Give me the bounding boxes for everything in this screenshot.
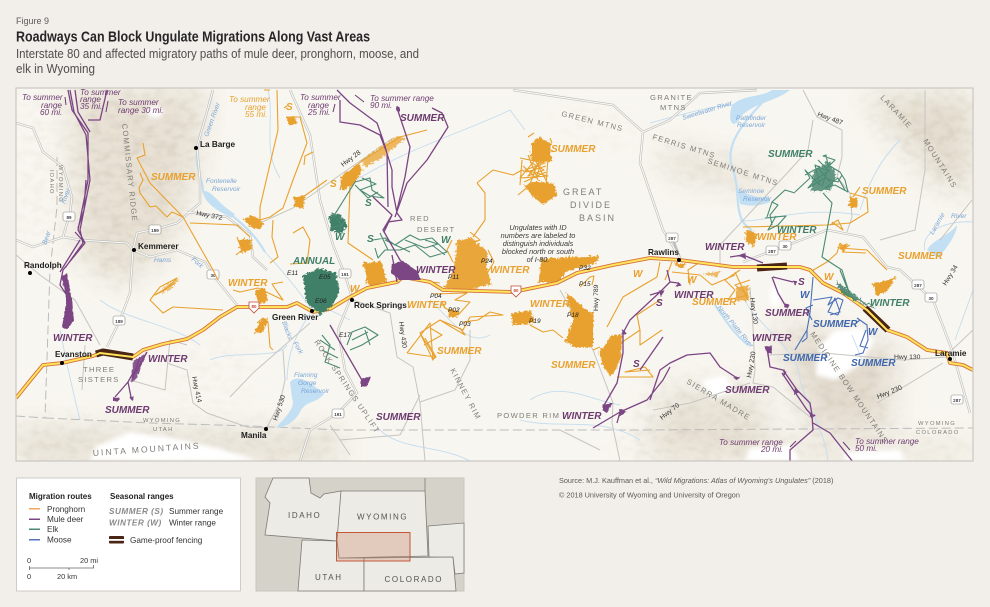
mountain and basin labels: WYOMING [918, 421, 956, 427]
figure number: Figure 9 [16, 16, 49, 27]
highway labels: Hwy 487 [816, 111, 844, 127]
range labels: mule deer: SUMMER [725, 385, 770, 396]
legend: scale bar: 0 [27, 572, 31, 581]
highway labels: Hwy 430 [397, 321, 408, 349]
panel: legend [16, 478, 240, 591]
water labels: River [951, 213, 967, 220]
water labels: Fork [291, 340, 304, 356]
panel: legend: Migration routes [29, 492, 92, 501]
range labels: elk: SUMMER [768, 149, 813, 160]
town labels and dots: Green River [272, 313, 319, 322]
range labels: pronghorn: WINTER [228, 278, 268, 289]
individual ID labels: P04 [430, 293, 442, 300]
title: Roadways Can Block Ungulate Migrations Along Vast Areas [16, 28, 370, 46]
water labels: Reservoir [212, 186, 241, 193]
water labels: Laramie [929, 212, 947, 236]
legend: scale bar: 0 [27, 556, 31, 565]
legend: scale bar [27, 556, 98, 581]
water labels: North Platte River [715, 305, 755, 350]
summer range distance notes [22, 88, 919, 454]
legend: route swatches: Elk [47, 525, 59, 534]
highway labels: Hwy 530 [272, 394, 287, 422]
legend: route swatches: Pronghorn [47, 505, 86, 514]
mountain and basin labels: IDAHO [48, 170, 54, 195]
range labels: elk: W [441, 235, 452, 246]
range labels: pronghorn: W [687, 275, 698, 286]
highway shields: 191 [341, 272, 349, 277]
individual ID labels: P03 [459, 321, 471, 328]
panel: locator inset map: UTAH [315, 573, 343, 582]
highway labels: Hwy 372 [196, 210, 223, 222]
panel: locator inset map: COLORADO [384, 575, 443, 584]
legend: seasonal ranges: SUMMER (S) [109, 507, 164, 516]
range labels: mule deer: WINTER [562, 411, 602, 422]
range labels: moose: SUMMER [813, 319, 858, 330]
state borders [16, 157, 973, 430]
legend: seasonal ranges: WINTER (W) [109, 518, 162, 528]
rivers and reservoirs [60, 90, 973, 461]
legend: route swatches: Moose [47, 536, 72, 544]
summer range distance notes: 60 mi. [40, 108, 62, 117]
highway labels: Hwy 70 [659, 402, 681, 422]
mountain and basin labels: GREEN MTNS [561, 109, 624, 133]
town labels and dots: Evanston [55, 350, 92, 359]
mountain and basin labels: MEDICINE BOW MOUNTAINS [808, 330, 890, 445]
callout: ID numbers note: distinguish individuals [503, 239, 574, 248]
mountain and basin labels: POWDER RIM [497, 411, 560, 420]
routes: pronghorn [137, 90, 895, 377]
legend: route swatches [29, 505, 86, 544]
range labels: pronghorn: S [286, 102, 293, 113]
mountain and basin labels: WYOMING [143, 418, 181, 424]
water labels: Seminoe [738, 188, 764, 195]
interstate shields [249, 286, 521, 313]
source note [559, 476, 833, 500]
individual ID labels [287, 258, 591, 339]
legend: game-proof fencing: Game-proof fencing [130, 536, 203, 545]
mountain and basin labels: UINTA MOUNTAINS [92, 440, 201, 458]
range labels: mule deer: WINTER [148, 354, 188, 365]
summer range distance notes: range [80, 95, 101, 104]
range labels: mule deer: SUMMER [376, 412, 421, 423]
range labels: mule deer: WINTER [752, 333, 792, 344]
subtitle: elk in Wyoming [16, 62, 95, 76]
highway shields: 30 [210, 273, 216, 278]
mountain and basin labels: KINNEY RIM [448, 367, 483, 421]
highway shields: 287 [768, 249, 776, 254]
highway shields: 30 [928, 296, 934, 301]
water labels: Fork [190, 256, 205, 270]
range labels: pronghorn: W [350, 284, 361, 295]
water labels: Flaming [294, 372, 318, 379]
mountain and basin labels: MOUNTAINS [921, 137, 959, 190]
range labels: mule deer [53, 113, 810, 423]
mountain and basin labels: COMMISSARY RIDGE [120, 123, 139, 222]
mountain and basin labels: SIERRA MADRE [685, 377, 752, 422]
mountain and basin labels: BASIN [579, 213, 616, 223]
highway labels: Hwy 230 [876, 384, 903, 401]
map frame [16, 88, 973, 461]
mountain and basin labels: UTAH [153, 427, 174, 433]
callout: ID numbers note [501, 223, 575, 264]
highway labels: Hwy 789 [593, 284, 600, 311]
individual ID labels: P02 [448, 307, 460, 314]
town labels and dots: La Barge [200, 140, 235, 149]
highway labels: Hwy 414 [190, 376, 202, 403]
individual ID labels: P18 [567, 312, 579, 319]
panel: legend: Seasonal ranges [110, 492, 174, 501]
range labels: pronghorn: SUMMER [692, 297, 737, 308]
range labels: mule deer: SUMMER [105, 405, 150, 416]
town labels and dots: Laramie [935, 349, 967, 358]
highway labels [190, 111, 960, 422]
legend: seasonal ranges: Winter range [169, 518, 216, 528]
individual ID labels: P24 [481, 258, 493, 265]
summer range distance notes: range [41, 101, 62, 110]
town labels and dots: Randolph [24, 261, 62, 270]
water labels [41, 100, 967, 395]
routes: moose [795, 277, 868, 355]
range labels: elk [292, 149, 910, 309]
summer range distance notes: To summer [80, 88, 121, 97]
panel: main map [16, 88, 973, 462]
routes: mule deer [60, 90, 853, 462]
summer range distance notes: To summer [118, 98, 159, 107]
interstate shields: 80 [252, 304, 257, 309]
water labels: River [60, 187, 72, 205]
range labels: pronghorn [151, 102, 943, 371]
summer range distance notes: To summer range [719, 438, 783, 447]
callout: ID numbers note: blocked north or south [502, 247, 574, 256]
range labels: pronghorn: S [330, 179, 337, 190]
water labels: Green River [203, 101, 222, 138]
range labels: mule deer: WINTER [705, 242, 745, 253]
highway shields: 89 [66, 215, 72, 220]
range labels: mule deer: SUMMER [765, 308, 810, 319]
mountain and basin labels: DESERT [417, 225, 455, 234]
mountain and basin labels: LARAMIE [879, 93, 914, 130]
legend: scale bar: 20 mi [80, 556, 98, 565]
interstate shields: 80 [514, 288, 519, 293]
water labels: Blacks [280, 320, 294, 342]
mountain and basin labels: THREE [83, 365, 115, 374]
highway labels: Hwy 230 [746, 351, 758, 378]
panel: locator inset map: WYOMING [357, 512, 408, 522]
town labels and dots [24, 140, 967, 440]
highway shields: 30 [782, 244, 788, 249]
town labels and dots: Rawlins [648, 248, 679, 257]
water labels: Gorge [298, 380, 317, 387]
range labels: elk: W [335, 232, 346, 243]
individual ID labels: P15 [579, 281, 591, 288]
range labels: pronghorn: WINTER [530, 299, 570, 310]
range labels: pronghorn: W [633, 269, 644, 280]
subtitle: Interstate 80 and affected migratory paths of mule deer, pronghorn, moose, and [16, 47, 419, 61]
orange distance note: range [245, 103, 266, 112]
mountain and basin labels: FERRIS MTNS [651, 132, 717, 160]
highway shields [63, 212, 963, 418]
range labels: mule deer: S [798, 277, 805, 288]
range labels: mule deer: S [656, 298, 663, 309]
highway shields: 287 [953, 398, 961, 403]
water labels: Reservoir [737, 122, 766, 129]
range labels: mule deer: WINTER [53, 333, 93, 344]
town labels and dots: Rock Springs [354, 301, 407, 310]
summer range distance notes: range [308, 101, 329, 110]
range labels: moose: SUMMER [851, 358, 896, 369]
range labels: mule deer: SUMMER [400, 113, 445, 124]
mountain and basin labels: SEMINOE MTNS [706, 156, 780, 188]
water labels: Bear [41, 229, 53, 246]
range labels: pronghorn: SUMMER [551, 144, 596, 155]
summer range distance notes: 25 mi. [307, 108, 330, 117]
range labels: pronghorn: SUMMER [151, 172, 196, 183]
range labels: mule deer: WINTER [674, 290, 714, 301]
range labels: mule deer: S [633, 359, 640, 370]
highway labels: Hwy 34 [942, 264, 960, 287]
highway labels: Hwy 130 [748, 297, 759, 325]
range labels: moose [783, 290, 896, 369]
individual ID labels: E05 [319, 274, 331, 281]
mountain and basin labels [48, 93, 960, 458]
summer range distance notes: 20 mi. [760, 445, 783, 454]
highway shields: 287 [914, 283, 922, 288]
summer range distance notes: To summer range [855, 437, 919, 446]
mountain and basin labels: MTNS [660, 103, 687, 112]
legend: seasonal ranges: Summer range [169, 507, 224, 516]
source note: © 2018 University of Wyoming and University of Oregon [559, 490, 740, 500]
range labels: pronghorn: W [824, 272, 835, 283]
water labels: Reservoir [743, 196, 772, 203]
mountain and basin labels: WYOMING [57, 165, 63, 203]
range labels: elk: WINTER [870, 298, 910, 309]
range labels: elk: ANNUAL [292, 256, 335, 267]
individual ID labels: P19 [529, 318, 541, 325]
legend: scale bar: 20 km [57, 572, 77, 581]
mountain and basin labels: ROCK SPRINGS UPLIFT [312, 338, 382, 435]
range labels: pronghorn: SUMMER [551, 360, 596, 371]
individual ID labels: E17 [339, 332, 351, 339]
mountain and basin labels: RED [410, 214, 430, 223]
snow-white high peaks [90, 106, 905, 461]
summer range distance notes: 35 mi. [80, 102, 102, 111]
callout: ID numbers note: Ungulates with ID [509, 223, 567, 232]
mountain and basin labels: GRANITE [650, 93, 693, 102]
summer range distance notes: range 30 mi. [118, 106, 164, 115]
mountain and basin labels: DIVIDE [570, 200, 612, 210]
mountain and basin labels: GREAT [563, 187, 603, 197]
range labels: mule deer: WINTER [416, 265, 456, 276]
range labels: pronghorn: SUMMER [862, 186, 907, 197]
range labels: elk: S [367, 234, 374, 245]
range labels: moose: SUMMER [783, 353, 828, 364]
orange distance note: 55 mi. [245, 110, 267, 119]
orange distance note: To summer [229, 95, 270, 104]
legend: seasonal ranges [109, 507, 224, 528]
range labels: elk: WINTER [777, 225, 817, 236]
range labels: pronghorn: SUMMER [898, 251, 943, 262]
summer range distance notes: 90 mi. [370, 101, 392, 110]
interstate 80 with game-proof fencing [16, 258, 973, 398]
individual ID labels: E06 [315, 298, 327, 305]
source note: Source: M.J. Kauffman et al., “Wild Migrations: Atlas of Wyoming’s Ungulates” (2018) [559, 476, 833, 485]
highway labels: Hwy 130 [894, 354, 921, 361]
highway shields: 287 [668, 236, 676, 241]
summer range distance notes: To summer [22, 93, 63, 102]
callout: ID numbers note: numbers are labeled to [501, 231, 575, 240]
water labels: Sweetwater River [682, 100, 734, 122]
range labels: elk: S [365, 198, 372, 209]
highway shields: 189 [115, 319, 123, 324]
town labels and dots: Manila [241, 431, 267, 440]
water labels: Reservoir [301, 388, 330, 395]
highway labels: Hwy 28 [340, 149, 362, 169]
summer range distance notes: To summer [300, 93, 341, 102]
range labels: pronghorn: WINTER [757, 232, 797, 243]
subtitle [16, 47, 419, 76]
water labels: Fontenelle [206, 178, 237, 185]
highway shields: 189 [151, 228, 159, 233]
range labels: pronghorn: WINTER [407, 300, 447, 311]
summer range distance notes: To summer range [370, 94, 434, 103]
panel: locator inset map: IDAHO [288, 511, 321, 520]
range labels: moose: W [800, 290, 811, 301]
callout: ID numbers note: of I-80. [527, 255, 549, 264]
roads [16, 90, 973, 461]
summer range distance notes: 50 mi. [855, 444, 877, 453]
highway shields: 191 [334, 412, 342, 417]
routes: elk [302, 155, 876, 368]
individual ID labels: E11 [287, 270, 298, 277]
legend: route swatches: Mule deer [47, 515, 84, 524]
water labels: Pathfinder [736, 115, 767, 122]
mountain and basin labels: COLORADO [916, 430, 960, 436]
water labels: Hams [154, 257, 172, 264]
individual ID labels: P32 [579, 265, 591, 272]
individual ID labels: P11 [448, 274, 459, 281]
town labels and dots: Kemmerer [138, 242, 179, 251]
range labels: pronghorn: WINTER [490, 265, 530, 276]
orange distance note [230, 96, 270, 117]
mountain and basin labels: SISTERS [78, 375, 120, 384]
range labels: pronghorn: SUMMER [437, 346, 482, 357]
range labels: moose: W [868, 327, 879, 338]
panel: locator inset map [256, 478, 464, 591]
